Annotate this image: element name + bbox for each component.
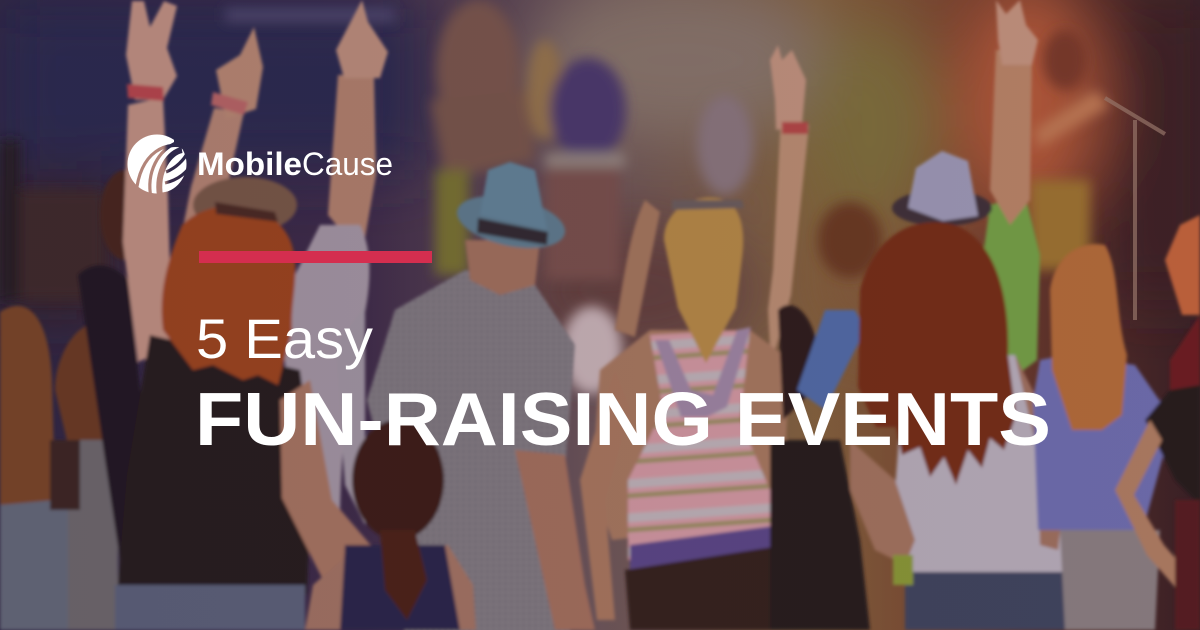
dark-top person bbox=[770, 440, 870, 630]
logo wordmark: Cause bbox=[302, 146, 393, 182]
arm and striped top woman bbox=[768, 115, 809, 365]
red hair woman bbox=[280, 225, 369, 535]
title: FUN-RAISING EVENTS: FUN-RAISING EVENTS bbox=[195, 377, 1051, 461]
blue hat bbox=[452, 162, 570, 257]
red hair right woman bbox=[1033, 355, 1173, 530]
stage banner bbox=[225, 8, 395, 22]
green shirt man bbox=[977, 195, 1040, 390]
stage performers bbox=[436, 0, 520, 140]
logo globe icon bbox=[128, 134, 186, 194]
red accent bar bbox=[199, 251, 432, 263]
logo: MobileCause bbox=[128, 134, 392, 194]
far right people bbox=[1165, 215, 1200, 315]
logo wordmark: Mobile bbox=[197, 146, 302, 182]
logo wordmark bbox=[197, 146, 393, 182]
microphone stand bbox=[1105, 98, 1165, 320]
checked shirt man bbox=[335, 305, 365, 525]
curly hair woman bbox=[895, 355, 1065, 580]
girl with ponytail bbox=[305, 545, 476, 630]
checked hat bbox=[892, 151, 992, 226]
blue shirt bbox=[797, 310, 865, 410]
subtitle: 5 Easy: 5 Easy bbox=[196, 307, 373, 370]
far left blurred crowd bbox=[0, 500, 80, 630]
raised arms left bbox=[123, 97, 172, 362]
